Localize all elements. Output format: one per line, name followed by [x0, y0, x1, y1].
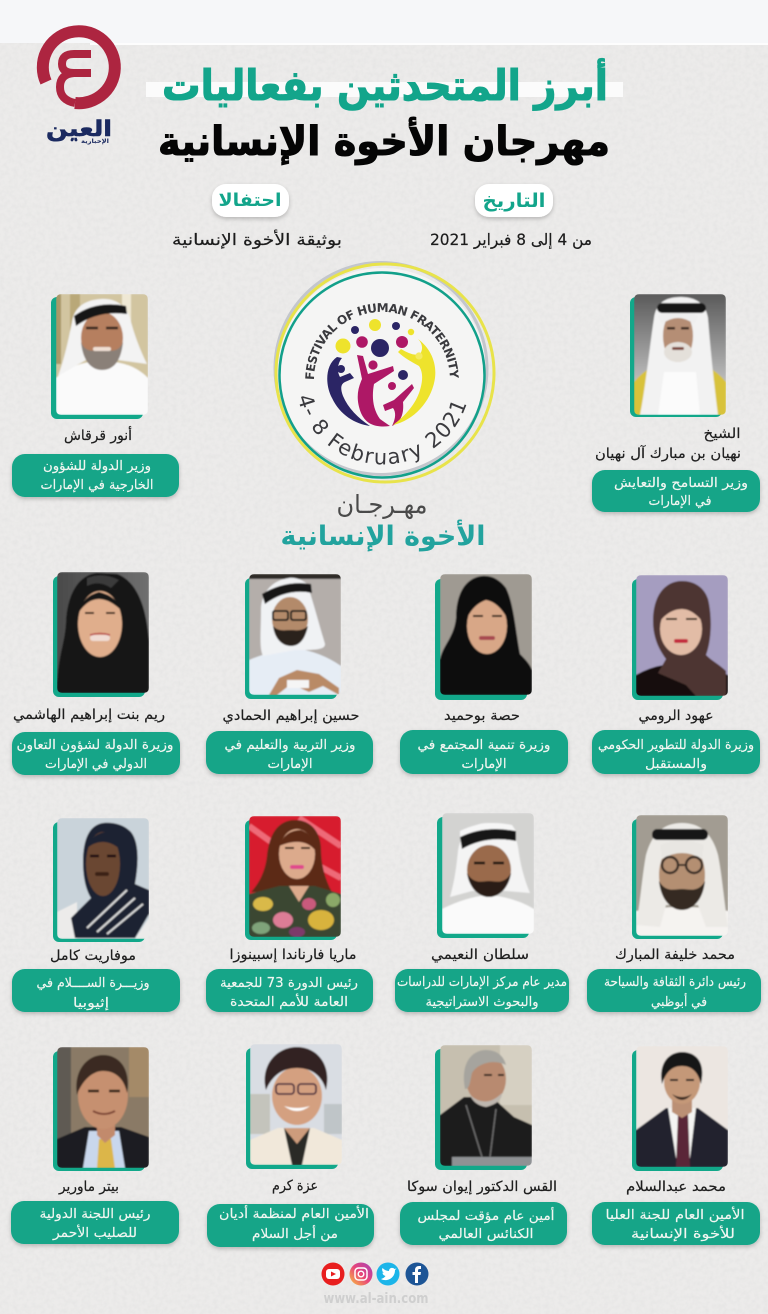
portrait photo: [440, 574, 532, 695]
role pill: للصليب الأحمر: [52, 1224, 137, 1241]
name: محمد عبدالسلام: [626, 1179, 726, 1195]
role pill: وزيرة تنمية المجتمع في: [418, 738, 550, 753]
role pill: رئيس دائرة الثقافة والسياحة: [604, 975, 746, 990]
photo frame: [632, 1050, 723, 1171]
photo frame: [53, 822, 145, 942]
role pill: الأمين العام للجنة العليا: [606, 1206, 744, 1223]
name: القس الدكتور إيوان سوكا: [407, 1179, 557, 1195]
role pill: الإمارات: [268, 757, 312, 772]
name: الشيخ: [704, 426, 740, 442]
role pill: في أبوظبي: [651, 993, 707, 1010]
role pill: والبحوث الاستراتيجية: [426, 995, 538, 1010]
emblem arc text: 4- 8 February 2021: [300, 396, 466, 465]
name: موفاريت كامل: [50, 948, 136, 964]
photo frame: [245, 578, 337, 699]
festival emblem: [274, 261, 496, 484]
name: محمد خليفة المبارك: [615, 947, 735, 963]
role pill: أمين عام مؤقت لمجلس: [418, 1207, 554, 1224]
speaker: Maria Fernanda Espinosa: [206, 816, 373, 1012]
name: سلطان النعيمي: [431, 947, 529, 963]
speaker: Sultan Al Nuaimi: [395, 813, 569, 1012]
portrait photo: [249, 816, 341, 937]
role pill: وزير التربية والتعليم في: [224, 738, 356, 753]
role pill: [12, 969, 180, 1012]
name: ماريا فارناندا إسبينوزا: [230, 947, 356, 963]
celebration pill: احتفالا: [218, 190, 282, 211]
logo wordmark: الإخبارية: [81, 138, 109, 145]
role pill: [206, 969, 373, 1012]
name: حسين إبراهيم الحمادي: [222, 708, 360, 724]
emblem figures: [327, 319, 435, 426]
celebration pill: [212, 184, 289, 217]
role pill: وزيـــرة الســــلام في: [36, 976, 150, 991]
role pill: للأخوة الإنسانية: [631, 1225, 735, 1242]
speaker: Nahyan bin Mubarak: [592, 294, 760, 512]
name: بيتر ماورير: [58, 1179, 119, 1195]
portrait photo: [57, 572, 149, 693]
role pill: إثيوبيا: [73, 996, 109, 1011]
photo frame: [435, 1049, 527, 1170]
role pill: الخارجية في الإمارات: [40, 478, 154, 493]
role pill: [592, 1202, 760, 1245]
role pill: في الإمارات: [648, 494, 712, 509]
role pill: [12, 454, 179, 497]
icon: logo mark: [43, 31, 115, 103]
role pill: وزير التسامح والتعايش: [614, 476, 748, 491]
celebration text: بوثيقة الأخوة الإنسانية: [172, 229, 342, 250]
role pill: الإمارات: [462, 757, 506, 772]
name: [595, 426, 741, 462]
logo: Al-Ain News: [43, 31, 115, 145]
role pill: [207, 1204, 374, 1247]
website url: www.al-ain.com: [324, 1291, 428, 1307]
role pill: [395, 969, 569, 1012]
icon: youtube: [322, 1262, 344, 1286]
role pill: [592, 470, 760, 512]
portrait photo: [250, 1044, 342, 1165]
role pill: الأمين العام لمنظمة أديان: [219, 1205, 369, 1222]
name: عهود الرومي: [638, 708, 714, 724]
photo frame: [435, 579, 527, 700]
role pill: وزير الدولة للشؤون: [43, 459, 151, 474]
role pill: [11, 1201, 179, 1244]
speaker: Mohamed Khalifa Al Mubarak: [587, 815, 761, 1012]
role pill: رئيس الدورة 73 للجمعية: [220, 976, 358, 991]
speaker: Hessa Buhumaid: [400, 574, 568, 774]
title line 2: مهرجان الأخوة الإنسانية: [158, 116, 610, 165]
icon: instagram: [350, 1262, 372, 1286]
photo frame: [53, 576, 145, 697]
role pill: [12, 732, 180, 775]
speaker: Mofarreat Kamil: [12, 818, 180, 1012]
role pill: العامة للأمم المتحدة: [230, 993, 348, 1010]
name: أنور قرقاش: [64, 426, 132, 444]
portrait photo: [57, 1047, 149, 1168]
date pill: التاريخ: [482, 190, 546, 212]
date block: [430, 184, 592, 250]
photo frame: [632, 819, 723, 939]
speaker: Azza Karam: [207, 1044, 374, 1247]
role pill: [206, 731, 373, 774]
portrait photo: [634, 294, 726, 415]
emblem arc text: [300, 303, 466, 465]
photo frame: [51, 297, 143, 419]
portrait photo: [57, 818, 149, 939]
role pill: مدير عام مركز الإمارات للدراسات: [397, 975, 567, 990]
portrait photo: [636, 1046, 728, 1167]
speaker: Peter Maurer: [11, 1047, 179, 1244]
emblem arc text: FESTIVAL OF HUMAN FRATERNITY: [305, 303, 459, 379]
speaker: Ioan Sauca: [400, 1045, 567, 1245]
speaker: Hussain Al Hammadi: [206, 574, 373, 774]
festival name: second line: الأخوة الإنسانية: [280, 519, 486, 552]
name: نهيان بن مبارك آل نهيان: [595, 445, 741, 462]
role pill: وزيرة الدولة لشؤون التعاون: [16, 738, 174, 753]
speaker: Mohamed Abdel Salam: [592, 1046, 760, 1245]
photo frame: [246, 1048, 338, 1169]
celebration block: [172, 184, 342, 250]
date pill: [475, 184, 553, 217]
role pill: [400, 730, 568, 774]
name: ريم بنت إبراهيم الهاشمي: [13, 707, 165, 723]
speaker: Reem Al Hashimy: [12, 572, 180, 775]
photo frame: [245, 820, 337, 940]
portrait photo: [249, 574, 341, 695]
portrait photo: [636, 575, 728, 696]
role pill: الدولي في الإمارات: [45, 757, 147, 772]
role pill: [592, 730, 760, 774]
role pill: والمستقبل: [645, 757, 707, 772]
role pill: من أجل السلام: [252, 1225, 338, 1242]
icon: twitter: [376, 1262, 400, 1286]
icon: facebook: [406, 1262, 428, 1286]
title line 1 highlight and text: أبرز المتحدثين بفعاليات: [162, 58, 608, 111]
photo frame: [437, 817, 529, 938]
social icons: [322, 1262, 428, 1286]
role pill: الكنائس العالمي: [438, 1227, 534, 1242]
portrait photo: [440, 1045, 532, 1166]
logo wordmark: العين: [46, 117, 112, 142]
portrait photo: [56, 294, 148, 415]
portrait photo: [636, 815, 728, 936]
photo frame: [53, 1051, 145, 1171]
date text: من 4 إلى 8 فبراير 2021: [430, 230, 592, 250]
photo frame: [630, 297, 722, 417]
speaker: Anwar Gargash: [12, 294, 179, 497]
name: عزة كرم: [272, 1178, 318, 1194]
role pill: وزيرة الدولة للتطوير الحكومي: [598, 738, 754, 753]
role pill: رئيس اللجنة الدولية: [40, 1207, 150, 1222]
photo frame: [632, 579, 723, 700]
role pill: [400, 1202, 567, 1245]
name: حصة بوحميد: [444, 708, 520, 724]
speaker: Ohood Al Roumi: [592, 575, 760, 774]
festival name: first word: مهـرجـان: [336, 490, 428, 520]
role pill: [587, 969, 761, 1012]
portrait photo: [442, 813, 534, 934]
